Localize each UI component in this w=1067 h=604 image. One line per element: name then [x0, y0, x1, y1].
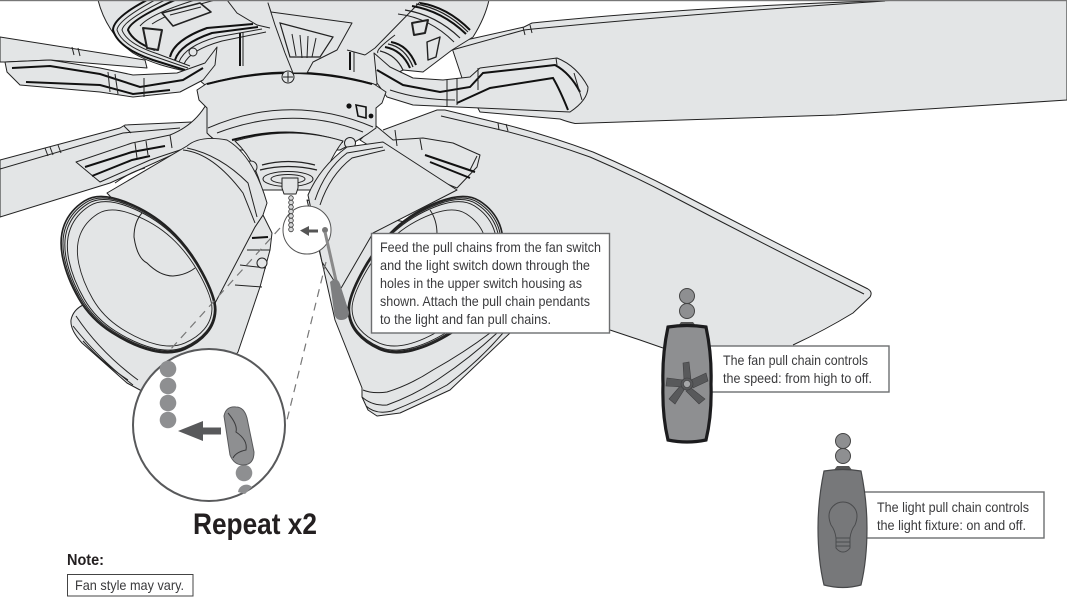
switch cup — [235, 133, 356, 194]
iron: lower right — [360, 125, 480, 188]
iron: lower left — [76, 103, 212, 183]
hub cylinder — [197, 72, 386, 150]
blade: upper left — [0, 37, 147, 68]
right lamp — [307, 142, 520, 416]
heading: Repeat x2: Repeat x2 — [193, 508, 317, 541]
iron: upper right — [374, 53, 588, 112]
instruction box — [372, 234, 610, 333]
callout: light pull chain: The light pull chain controls — [877, 499, 1029, 515]
callout: fan pull chain: the speed: from high to off. — [723, 370, 872, 386]
bulb — [134, 213, 195, 276]
small pendant and chain — [325, 232, 349, 320]
note box — [68, 574, 193, 596]
left lamp — [61, 138, 272, 400]
note label: Note: — [67, 552, 104, 569]
dashed leader lines — [170, 228, 326, 420]
chain beads — [160, 361, 252, 494]
motor housing — [98, 0, 489, 85]
instruction box: shown. Attach the pull chain pendants — [380, 293, 590, 309]
callout: light pull chain — [855, 492, 1044, 538]
bulb — [430, 210, 437, 234]
blade: lower right — [383, 110, 871, 358]
light pendant — [818, 434, 867, 588]
detail circle: large — [133, 349, 285, 501]
bulb symbol — [829, 502, 857, 552]
blade: upper right — [452, 0, 1067, 124]
finial — [268, 3, 352, 83]
detail circle: small — [283, 206, 331, 254]
top edge rule — [0, 0, 1067, 1]
instruction box: and the light switch down through the — [380, 257, 590, 273]
note box: Fan style may vary. — [75, 577, 184, 593]
iron: upper left — [5, 47, 217, 97]
pendant — [224, 407, 254, 465]
blade: lower left — [0, 122, 205, 217]
arrow — [178, 421, 221, 441]
fan pendant — [663, 288, 711, 442]
pull chain from switch — [289, 196, 293, 232]
instruction box: holes in the upper switch housing as — [380, 275, 582, 291]
callout: fan pull chain: The fan pull chain controls — [723, 352, 868, 368]
instruction box: Feed the pull chains from the fan switch — [380, 239, 601, 255]
callout: light pull chain: the light fixture: on and off. — [877, 517, 1026, 533]
instruction box: to the light and fan pull chains. — [380, 311, 551, 327]
lamp rim — [348, 196, 503, 353]
fan symbol — [666, 362, 708, 404]
callout: fan pull chain — [700, 346, 889, 392]
lamp rim — [61, 196, 216, 353]
